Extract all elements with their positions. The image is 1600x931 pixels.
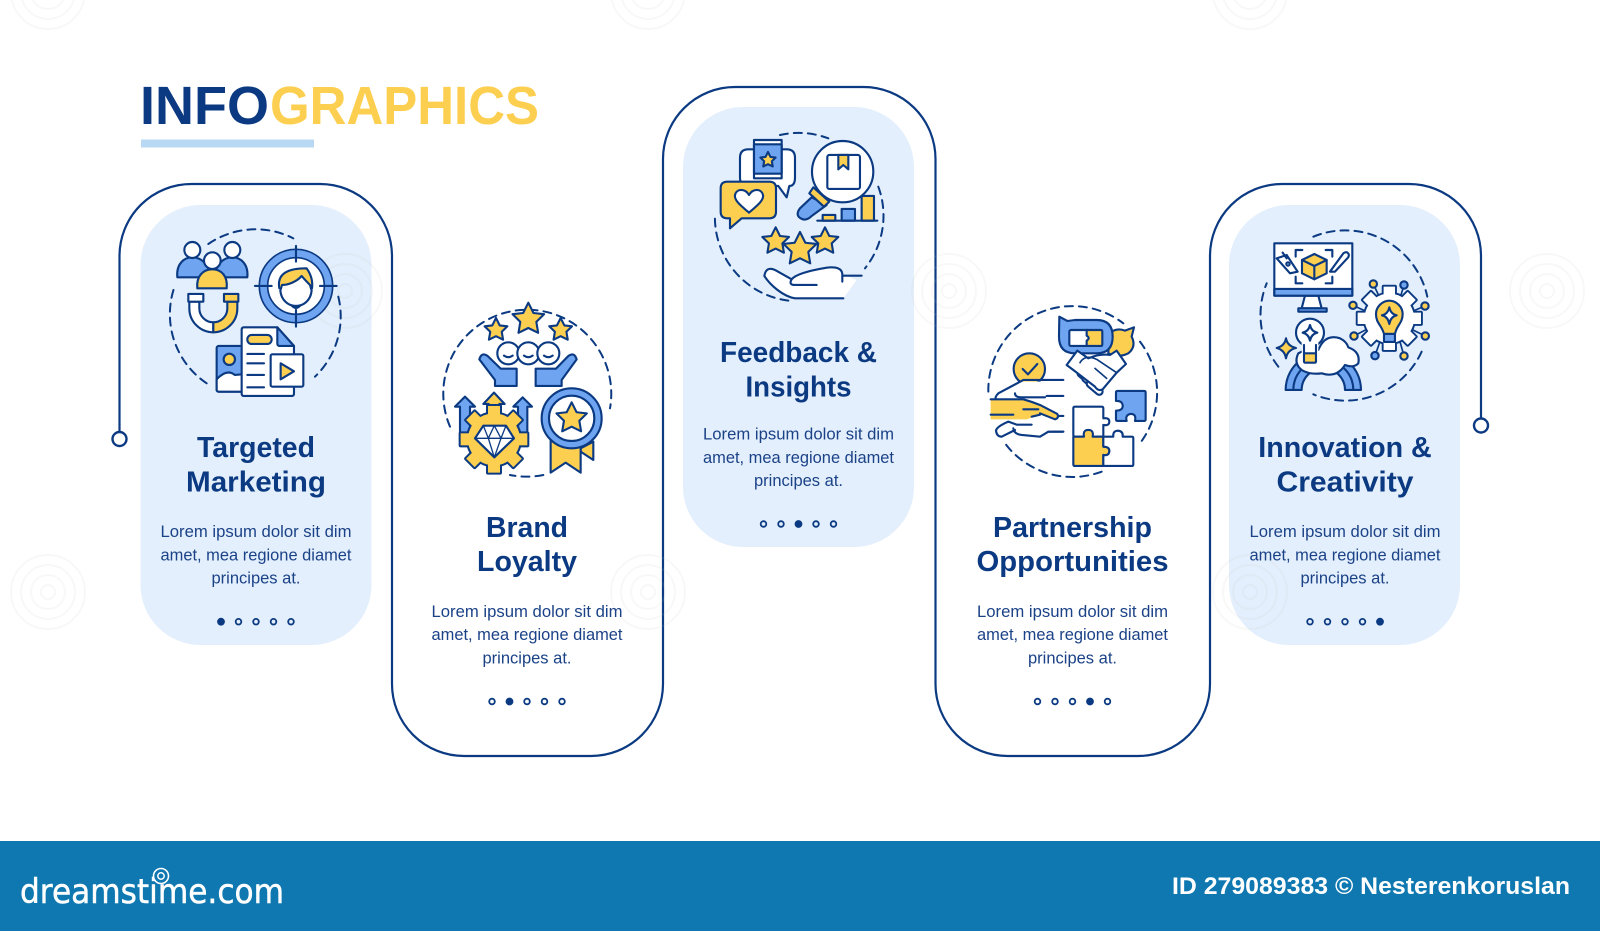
- heading: Partnership: [993, 512, 1152, 544]
- heading: [720, 337, 877, 404]
- footer bar: [0, 841, 1600, 931]
- body text: amet, mea regione diamet: [160, 546, 352, 564]
- footer logo: dreamstime.com: [20, 872, 284, 912]
- panel fill: feedback and insights: [683, 107, 914, 547]
- connecting outline with end circles: [112, 87, 1488, 756]
- icon: targeted marketing: [170, 229, 341, 396]
- body text: principes at.: [754, 472, 843, 490]
- icon: feedback and insights: [715, 133, 883, 301]
- body text: principes at.: [482, 650, 572, 668]
- body text: Lorem ipsum dolor sit dim: [703, 426, 894, 444]
- body text: amet, mea regione diamet: [432, 626, 623, 644]
- heading: [1258, 432, 1432, 498]
- panel: partnership opportunities: [976, 306, 1168, 704]
- icon: partnership opportunities: [988, 306, 1157, 477]
- heading: [477, 512, 577, 578]
- footer credit: ID 279089383 © Nesterenkoruslan: [1172, 873, 1570, 900]
- body text: principes at.: [1028, 650, 1117, 668]
- body text: [977, 603, 1168, 668]
- body text: principes at.: [1300, 570, 1390, 588]
- body text: Lorem ipsum dolor sit dim: [977, 603, 1168, 621]
- heading: Marketing: [186, 466, 326, 498]
- body text: Lorem ipsum dolor sit dim: [160, 523, 352, 541]
- heading: Feedback &: [720, 337, 877, 369]
- heading: Insights: [746, 372, 852, 404]
- body text: [703, 426, 894, 490]
- panel: innovation and creativity: [1250, 230, 1441, 625]
- pagination dots: [761, 521, 836, 527]
- panel: brand loyalty: [432, 303, 623, 704]
- panel: feedback and insights: [703, 133, 894, 527]
- body text: Lorem ipsum dolor sit dim: [432, 603, 622, 621]
- body text: amet, mea regione diamet: [977, 626, 1168, 644]
- body text: [432, 603, 623, 668]
- body text: [1250, 523, 1441, 588]
- pagination dots: [489, 698, 565, 704]
- panel: targeted marketing: [160, 229, 352, 625]
- title text: GRAPHICS: [270, 76, 539, 136]
- heading: Opportunities: [976, 546, 1168, 578]
- body text: principes at.: [212, 570, 300, 588]
- pagination dots: [1307, 619, 1383, 625]
- heading: [976, 512, 1168, 578]
- panel fill: innovation and creativity: [1229, 205, 1460, 645]
- title text: INFO: [140, 76, 269, 136]
- pagination dots: [1035, 698, 1110, 704]
- panel fill: targeted marketing: [140, 205, 372, 645]
- watermarks: [11, 0, 1584, 629]
- title text: [140, 76, 539, 136]
- heading: [186, 432, 326, 498]
- title: [140, 76, 539, 148]
- icon: innovation and creativity: [1260, 230, 1429, 401]
- heading: Loyalty: [477, 546, 577, 578]
- heading: Innovation &: [1258, 432, 1432, 464]
- title underline: [141, 140, 314, 148]
- heading: Targeted: [197, 432, 315, 464]
- body text: [160, 523, 352, 588]
- body text: amet, mea regione diamet: [1250, 546, 1441, 564]
- pagination dots: [218, 619, 294, 625]
- icon: brand loyalty: [443, 303, 611, 477]
- heading: Creativity: [1276, 466, 1414, 498]
- body text: amet, mea regione diamet: [703, 449, 894, 467]
- heading: Brand: [486, 512, 568, 544]
- body text: Lorem ipsum dolor sit dim: [1250, 523, 1440, 541]
